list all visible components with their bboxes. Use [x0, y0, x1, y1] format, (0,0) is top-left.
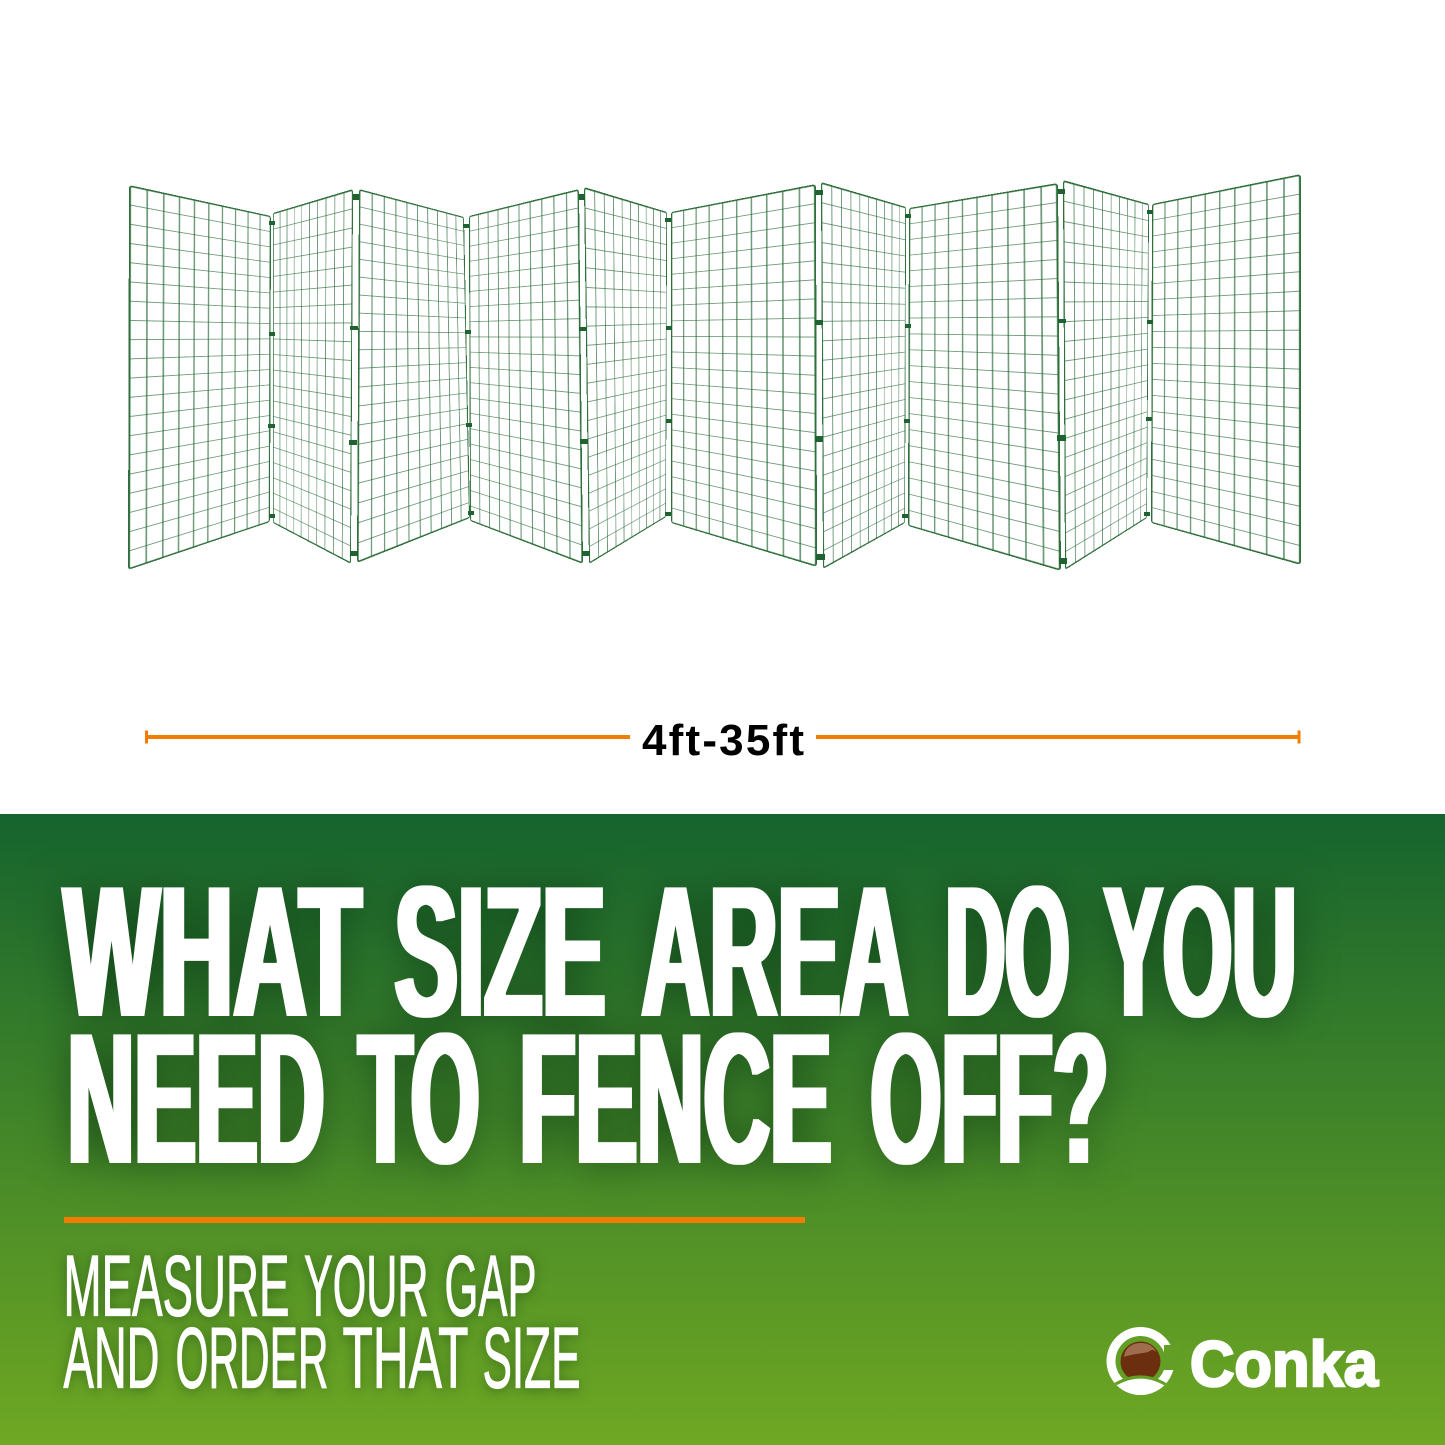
wordmark: Conka [1190, 1328, 1378, 1400]
headline: TO [358, 994, 480, 1203]
headline: FENCE [520, 994, 832, 1203]
headline: AREA [642, 847, 908, 1056]
fence graphic: ten folding mesh panels [128, 174, 1301, 570]
dimension line with size label [145, 716, 1300, 765]
fence panel 3 [357, 189, 470, 563]
headline: WHAT [64, 847, 362, 1056]
text and logo area [51, 847, 1380, 1406]
subheading: THAT [342, 1310, 468, 1406]
fence panel 8 [908, 183, 1061, 571]
size label: 4ft-35ft [642, 716, 804, 765]
headline: DO [946, 847, 1070, 1056]
subheading: AND [64, 1310, 160, 1406]
headline: OFF? [870, 994, 1108, 1203]
headline: SIZE [394, 847, 606, 1056]
panel connector clips [268, 189, 1153, 564]
fence panel 7 [821, 182, 906, 569]
subheading: SIZE [482, 1310, 580, 1406]
fence panel 6 [671, 184, 817, 567]
orange divider [64, 1217, 805, 1223]
subheading: GAP [444, 1238, 536, 1334]
green gradient band [0, 814, 1445, 1445]
fence panel 1 [128, 185, 271, 570]
icon: logo mark [1106, 1327, 1174, 1395]
logo: Conka [1106, 1327, 1380, 1395]
left dimension line [145, 730, 630, 744]
headline: NEED [68, 994, 324, 1203]
right dimension line [816, 730, 1300, 744]
fence panel 9 [1063, 180, 1149, 570]
fence panel 4 [469, 189, 583, 564]
subheading: ORDER [176, 1310, 328, 1406]
headline [64, 847, 1296, 1203]
subheading: MEASURE [64, 1238, 290, 1334]
subheading [64, 1238, 580, 1406]
fence panel 5 [584, 187, 667, 564]
subheading: YOUR [304, 1238, 428, 1334]
fence panel 2 [273, 189, 353, 564]
fence panel 10 [1151, 174, 1301, 565]
